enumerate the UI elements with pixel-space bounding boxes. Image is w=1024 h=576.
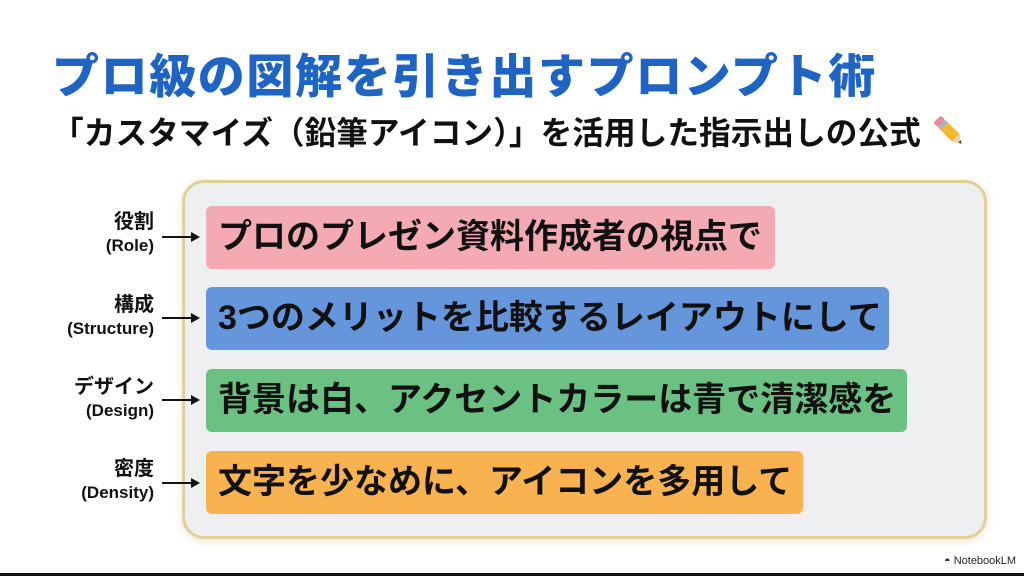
watermark: ◓ NotebookLM bbox=[944, 555, 1016, 567]
bar: role: プロのプレゼン資料作成者の視点で bbox=[218, 218, 762, 256]
label: role: 役割 bbox=[114, 211, 154, 233]
label: structure bbox=[67, 294, 154, 338]
bar: density: 文字を少なめに、アイコンを多用して bbox=[218, 463, 792, 501]
arrow: structure bbox=[162, 313, 200, 323]
label: role: (Role) bbox=[106, 236, 154, 255]
arrow: role bbox=[162, 232, 200, 242]
arrow: density bbox=[162, 478, 200, 488]
bar: role bbox=[206, 206, 775, 269]
label: density bbox=[81, 458, 154, 502]
title: プロ級の図解を引き出すプロンプト術 bbox=[52, 50, 877, 103]
bottom bar bbox=[0, 573, 1024, 576]
panel bbox=[182, 180, 987, 539]
label: density: (Density) bbox=[81, 483, 154, 502]
label: design: (Design) bbox=[86, 401, 154, 420]
label: structure: (Structure) bbox=[67, 319, 154, 338]
label: design bbox=[74, 376, 154, 420]
bar: structure bbox=[206, 287, 889, 350]
label: density: 密度 bbox=[114, 458, 154, 480]
label: role bbox=[106, 210, 154, 255]
bar: structure: 3つのメリットを比較するレイアウトにして bbox=[218, 299, 882, 337]
label: structure: 構成 bbox=[114, 294, 154, 316]
bar: design: 背景は白、アクセントカラーは青で清潔感を bbox=[218, 381, 896, 419]
bar: design bbox=[206, 369, 907, 432]
subtitle: 「カスタマイズ（鉛筆アイコン）」を活用した指示出しの公式 bbox=[52, 115, 921, 151]
bar: density bbox=[206, 451, 803, 514]
arrow: design bbox=[162, 395, 200, 405]
label: design: デザイン bbox=[74, 376, 154, 398]
